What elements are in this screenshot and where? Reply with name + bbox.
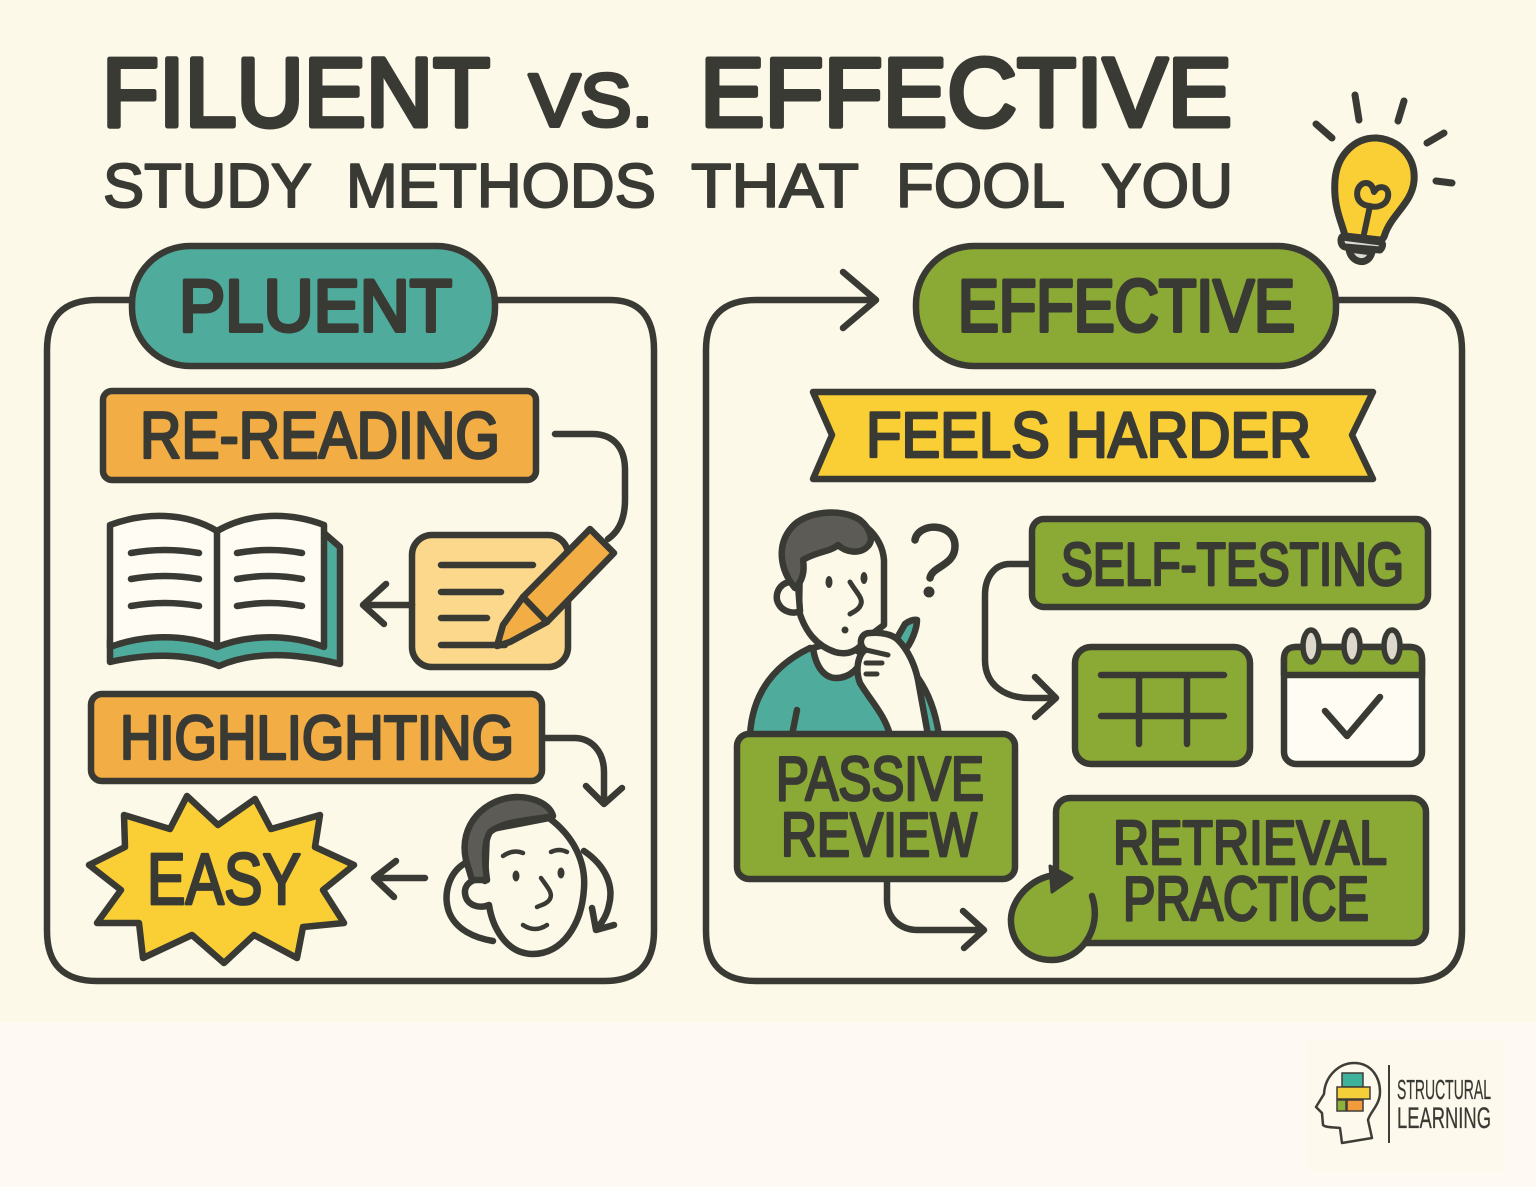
- subtitle: METHODS: [346, 152, 656, 221]
- label: retrieval practice: RETRIEVAL: [1113, 809, 1387, 878]
- label: highlighting: HIGHLIGHTING: [120, 704, 514, 773]
- subtitle: THAT: [691, 152, 859, 221]
- label: re-reading: RE-READING: [140, 398, 500, 472]
- heading: effective: EFFECTIVE: [958, 266, 1295, 347]
- label: retrieval practice: PRACTICE: [1123, 865, 1369, 934]
- icon: open book: [110, 516, 340, 666]
- subtitle: [103, 152, 1233, 221]
- icon: note with pencil: [412, 529, 614, 667]
- label: retrieval practice: [1056, 798, 1426, 943]
- icon: relaxed face: [447, 797, 614, 954]
- panel outline left: [47, 300, 654, 981]
- subtitle: FOOL: [896, 152, 1065, 221]
- label: passive review: REVIEW: [781, 801, 977, 870]
- label: passive review: [737, 734, 1015, 879]
- arrow: re-reading to pencil: [555, 434, 625, 539]
- title: [102, 38, 1232, 147]
- logo: structural learning: [1307, 1040, 1505, 1172]
- arrow: passive review to retrieval: [887, 880, 984, 948]
- icon: light bulb: [1316, 95, 1452, 262]
- label: passive review: PASSIVE: [776, 745, 984, 814]
- badge: easy: EASY: [147, 840, 301, 920]
- label: self-testing: SELF-TESTING: [1061, 531, 1404, 598]
- icon: calendar: [1284, 630, 1422, 764]
- subtitle: YOU: [1101, 152, 1233, 221]
- label: self-testing: [1032, 519, 1428, 607]
- arrow: highlighting to face: [545, 738, 622, 804]
- panel: fluent: [47, 246, 654, 981]
- badge: easy: [89, 796, 354, 963]
- heading: pluent: PLUENT: [179, 266, 452, 347]
- title: VS.: [529, 59, 653, 142]
- icon: cycle arrow: [1010, 866, 1096, 961]
- heading: pluent: [132, 246, 495, 366]
- title: EFFECTIVE: [700, 38, 1232, 147]
- heading: effective: [916, 246, 1336, 366]
- logo wordmark: [1397, 1074, 1491, 1135]
- icon: grid: [1075, 647, 1250, 764]
- banner: feels harder: FEELS HARDER: [866, 399, 1311, 471]
- panel outline right: [706, 300, 1462, 981]
- arrow: note to book: [363, 584, 412, 624]
- arrow: self-testing to grid: [985, 564, 1056, 717]
- panel: effective: [706, 246, 1462, 981]
- icon: thinking person: [750, 513, 939, 735]
- title: FILUENT: [102, 38, 490, 147]
- logo head icon: [1316, 1063, 1380, 1143]
- subtitle: STUDY: [103, 152, 312, 221]
- arrow head on panel top: [843, 272, 876, 328]
- arrow: face to easy: [374, 861, 425, 897]
- icon: question mark: [915, 527, 955, 598]
